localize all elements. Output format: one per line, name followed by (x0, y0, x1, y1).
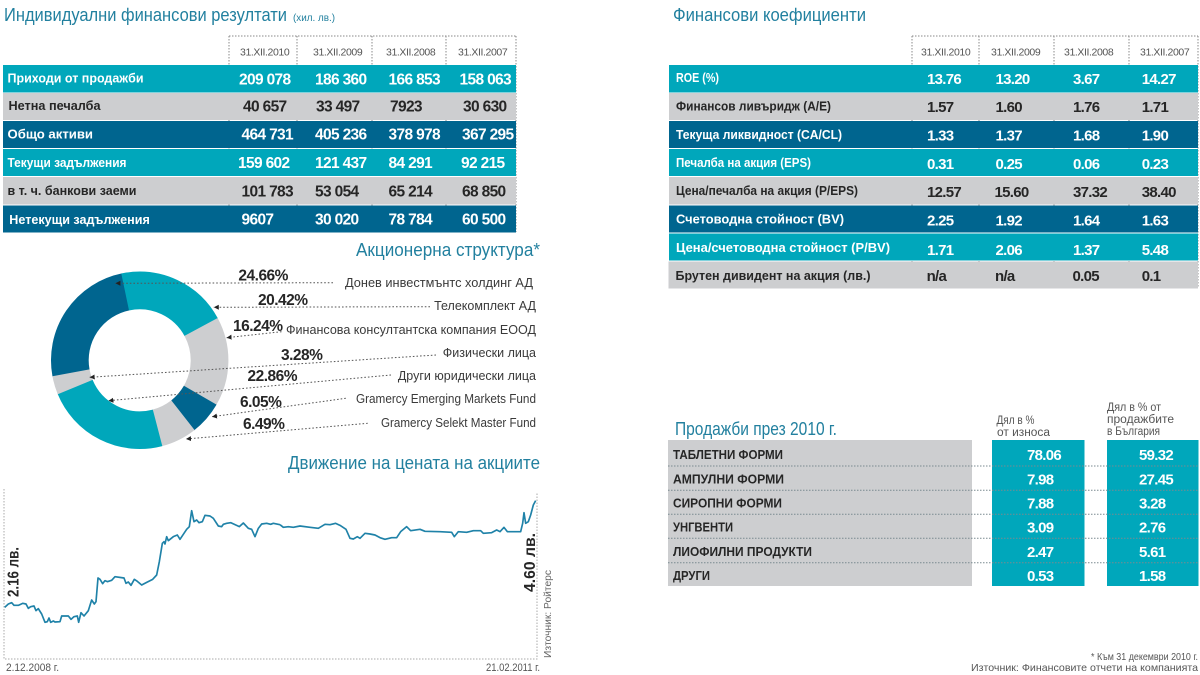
row: sales revenue: 209 078 (239, 72, 292, 88)
row: ointments: 3.09 (1027, 520, 1054, 536)
row: P/BV: 2.06 (996, 242, 1022, 259)
row: net profit: 30 630 (463, 98, 507, 116)
shareholder names (286, 276, 537, 430)
row: current ratio: 1.68 (1073, 128, 1100, 144)
row: other (673, 568, 1166, 585)
row: leverage: 1.60 (996, 99, 1022, 116)
row: ointments: УНГВЕНТИ (673, 520, 733, 534)
row: sales revenue: Приходи от продажби (8, 72, 144, 86)
row: other: 1.58 (1139, 568, 1166, 585)
row: current liabilities (3, 149, 516, 176)
row: current liabilities: 84 291 (388, 155, 433, 172)
column header: Bulgaria share: продажбите (1107, 414, 1174, 426)
ratios table header dates (912, 36, 1198, 288)
row: tablets: 78.06 (1027, 447, 1061, 464)
row: tablets (673, 447, 1173, 464)
shareholder names: Физически лица (443, 346, 536, 360)
row: lyophilized: 2.47 (1027, 544, 1054, 561)
row: ROE: 13.20 (996, 71, 1030, 88)
shareholder names: Донев инвестмънтс холдинг АД (345, 276, 534, 290)
panel: sales 2010 (668, 402, 1198, 586)
row: ampoules: АМПУЛНИ ФОРМИ (673, 472, 784, 486)
row: P/BV: 1.37 (1073, 242, 1100, 259)
label: start price: 2.16 лв. (6, 547, 22, 597)
footnotes: Източник: Финансовите отчети на компанията (971, 662, 1198, 674)
date: end: 21.02.2011 г. (486, 662, 540, 674)
row: P/BV: 5.48 (1142, 242, 1168, 259)
row: current ratio (669, 121, 1198, 148)
shareholder names: Телекомплект АД (434, 299, 537, 313)
row: P/BV: 1.71 (927, 242, 954, 259)
column header: Bulgaria share (1107, 402, 1174, 438)
column header: export share: Дял в % (996, 415, 1034, 427)
shareholder names: Други юридически лица (398, 369, 536, 383)
row: dividend: Брутен дивидент на акция (лв.) (676, 269, 870, 283)
panel: shareholder structure (42, 240, 540, 458)
row: P/BV (669, 234, 1198, 260)
heading: individual results: (хил. лв.) (293, 12, 335, 24)
heading: shareholder structure: Акционерна структура* (356, 240, 540, 260)
row: bank loans: 68 850 (462, 184, 506, 200)
row: total assets: 464 731 (242, 126, 294, 144)
row: P/EPS: 37.32 (1073, 184, 1107, 201)
panel: financial ratios (668, 5, 1198, 288)
heading: sales 2010: Продажби през 2010 г. (675, 419, 837, 439)
table header dates: 31.XII.2009 (313, 46, 363, 58)
row: net profit: 40 657 (243, 98, 287, 116)
line chart axes (4, 489, 537, 659)
row: book value: 1.92 (996, 212, 1022, 230)
row: current liabilities: Текущи задължения (8, 156, 126, 170)
row: ROE: 14.27 (1142, 71, 1176, 88)
row: bank loans (3, 177, 516, 204)
row: lyophilized: ЛИОФИЛНИ ПРОДУКТИ (673, 545, 812, 559)
panel: individual financial results (3, 5, 516, 232)
row: current ratio: 1.33 (927, 128, 954, 144)
row: non-current liabilities (3, 206, 516, 232)
row: non-current liabilities: 60 500 (462, 212, 506, 228)
row: leverage: 1.71 (1142, 99, 1168, 116)
row: syrups (673, 496, 1166, 512)
row: dividend: 0.05 (1072, 268, 1099, 285)
row: P/EPS: 38.40 (1142, 184, 1176, 201)
shareholder names: Gramercy Emerging Markets Fund (356, 392, 536, 406)
row: total assets (3, 121, 516, 148)
footnotes (971, 651, 1198, 674)
row: EPS (669, 149, 1198, 176)
row: dividend: 0.1 (1142, 268, 1161, 285)
row: syrups: СИРОПНИ ФОРМИ (673, 496, 782, 510)
leader arrows (90, 283, 436, 439)
percentages: 24.66% (238, 268, 289, 284)
row: bank loans: 101 783 (242, 184, 294, 200)
row: net profit: Нетна печалба (8, 99, 102, 113)
shareholder names: Gramercy Selekt Master Fund (381, 416, 536, 430)
row: current liabilities: 159 602 (238, 155, 290, 172)
row: ROE (669, 65, 1198, 92)
row: ampoules: 7.98 (1027, 472, 1054, 488)
row: ROE: 13.76 (927, 71, 961, 88)
row: P/EPS (669, 177, 1198, 204)
row: sales revenue (3, 65, 516, 92)
row: current ratio: 1.37 (996, 128, 1022, 144)
row: ointments: 2.76 (1139, 520, 1166, 536)
percentages (233, 268, 323, 433)
percentages: 22.86% (248, 368, 298, 385)
row: current liabilities: 121 437 (315, 155, 367, 172)
row: bank loans: 65 214 (388, 184, 433, 200)
percentages: 16.24% (233, 318, 283, 335)
ratios table header dates: 31.XII.2007 (1140, 46, 1190, 58)
table header dates (229, 36, 516, 232)
export share column background (992, 440, 1084, 586)
row: ampoules (673, 472, 1173, 488)
percentages: 6.49% (243, 416, 285, 433)
ratios table header dates: 31.XII.2009 (991, 46, 1041, 58)
row: ampoules: 27.45 (1139, 472, 1173, 488)
date: start: 2.12.2008 г. (6, 662, 59, 674)
row: ROE: 3.67 (1073, 71, 1100, 88)
column header: Bulgaria share: Дял в % от (1107, 402, 1162, 414)
row: non-current liabilities: 9607 (242, 212, 273, 228)
row: leverage: Финансов ливъридж (A/E) (676, 100, 831, 114)
column header: export share (996, 415, 1051, 439)
row: bank loans: в т. ч. банкови заеми (8, 184, 136, 198)
row: non-current liabilities: 78 784 (388, 212, 433, 228)
row separators (668, 466, 1198, 563)
row: EPS: Печалба на акция (EPS) (676, 156, 811, 170)
row: tablets: 59.32 (1139, 447, 1173, 464)
row: P/EPS: 15.60 (994, 184, 1029, 201)
row: book value: 1.64 (1073, 212, 1101, 230)
heading: financial ratios: Финансови коефициенти (673, 5, 866, 25)
row: lyophilized (673, 544, 1166, 561)
row: net profit (3, 93, 516, 120)
panel: share price movement (4, 453, 554, 674)
Bulgaria share column background (1107, 440, 1198, 586)
row: ointments (673, 520, 1166, 536)
heading: individual results: Индивидуални финансови резултати (4, 5, 287, 25)
row: dividend (668, 262, 1198, 288)
row: ROE: ROE (%) (676, 71, 719, 85)
label: end price: 4.60 лв. (522, 533, 539, 592)
shareholder names: Финансова консултантска компания ЕООД (286, 323, 537, 337)
percentages: 20.42% (258, 292, 308, 309)
row: EPS: 0.23 (1142, 156, 1168, 173)
row: EPS: 0.25 (996, 156, 1022, 173)
row: non-current liabilities: Нетекущи задължения (9, 213, 150, 227)
row: total assets: Общо активи (8, 128, 93, 142)
heading: share price: Движение на цената на акциите (288, 453, 540, 473)
row: other: 0.53 (1027, 568, 1054, 585)
table header dates: 31.XII.2007 (458, 46, 508, 58)
row: P/EPS: 12.57 (927, 184, 961, 201)
row: leverage: 1.57 (927, 99, 954, 116)
row: net profit: 7923 (390, 98, 423, 116)
row: non-current liabilities: 30 020 (315, 212, 359, 228)
ratios table header dates: 31.XII.2008 (1064, 46, 1114, 58)
source: Reuters: Източник: Ройтерс (542, 570, 554, 658)
row: bank loans: 53 054 (315, 184, 360, 200)
row: leverage: 1.76 (1073, 99, 1100, 116)
table header dates: 31.XII.2010 (240, 46, 290, 58)
row: net profit: 33 497 (316, 98, 360, 116)
row: lyophilized: 5.61 (1139, 544, 1166, 561)
line chart: share price (5, 501, 536, 622)
row: book value: 2.25 (927, 212, 954, 230)
row: current liabilities: 92 215 (461, 155, 506, 172)
row: total assets: 405 236 (315, 126, 368, 144)
table header dates: 31.XII.2008 (386, 46, 436, 58)
percentages: 3.28% (281, 347, 323, 364)
row: tablets: ТАБЛЕТНИ ФОРМИ (673, 448, 783, 462)
column header: export share: от износа (997, 427, 1051, 439)
row: current ratio: Текуща ликвидност (CA/CL) (676, 128, 842, 142)
row: total assets: 378 978 (388, 126, 441, 144)
row: other: ДРУГИ (673, 569, 710, 583)
row: sales revenue: 166 853 (388, 72, 441, 88)
row: sales revenue: 186 360 (315, 72, 367, 88)
ratios table header dates: 31.XII.2010 (921, 46, 971, 58)
row: P/EPS: Цена/печалба на акция (P/EPS) (676, 184, 858, 198)
row: EPS: 0.31 (927, 156, 954, 173)
row: EPS: 0.06 (1073, 156, 1100, 173)
donut chart (42, 262, 238, 458)
column header: Bulgaria share: в България (1107, 426, 1160, 438)
row: total assets: 367 295 (462, 126, 515, 144)
row: sales revenue: 158 063 (460, 72, 512, 88)
row: dividend: n/a (995, 268, 1016, 285)
percentages: 6.05% (240, 394, 282, 411)
row: book value (669, 206, 1198, 232)
row: book value: 1.63 (1142, 212, 1168, 230)
row: P/BV: Цена/счетоводна стойност (P/BV) (676, 241, 890, 255)
row: dividend: n/a (927, 268, 948, 285)
row: current ratio: 1.90 (1142, 128, 1168, 144)
label column background (668, 440, 972, 586)
row: syrups: 7.88 (1027, 496, 1054, 512)
row: syrups: 3.28 (1139, 496, 1166, 512)
row: book value: Счетоводна стойност (BV) (676, 212, 844, 226)
row: leverage (669, 93, 1198, 120)
